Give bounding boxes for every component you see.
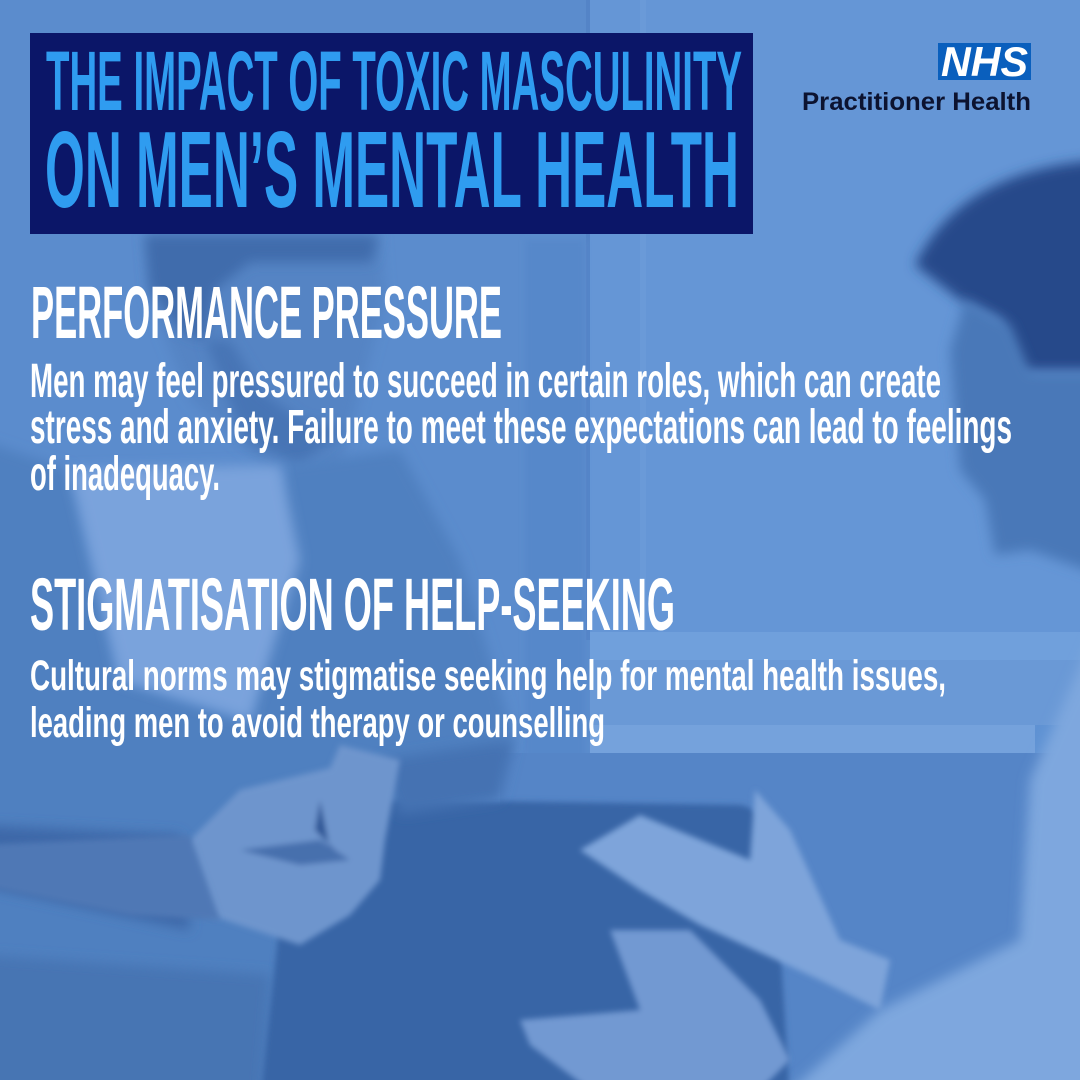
body text: leading men to avoid therapy or counselling — [30, 699, 605, 747]
man: forearm — [0, 835, 220, 920]
sofa — [260, 800, 790, 1080]
man: hair and head — [145, 235, 385, 470]
doctor: white coat — [780, 620, 1080, 1080]
doctor: face — [950, 300, 1080, 575]
doctor: hands — [520, 790, 890, 1080]
body text — [30, 652, 946, 747]
logo: NHS Practitioner Health — [802, 38, 1031, 116]
section: performance pressure — [30, 271, 1012, 501]
title block — [30, 33, 753, 234]
logo: NHS Practitioner Health: NHS — [941, 38, 1028, 85]
body text — [30, 355, 1012, 501]
logo: NHS Practitioner Health: Practitioner Health — [802, 88, 1031, 116]
man: clasped hands — [170, 745, 400, 945]
section: stigmatisation of help-seeking — [30, 563, 946, 747]
section: performance pressure: PERFORMANCE PRESSURE — [31, 271, 502, 354]
man: white t-shirt — [70, 465, 300, 720]
man: cardigan — [0, 440, 515, 1080]
doctor: hair — [915, 160, 1080, 372]
body text: of inadequacy. — [30, 448, 220, 501]
